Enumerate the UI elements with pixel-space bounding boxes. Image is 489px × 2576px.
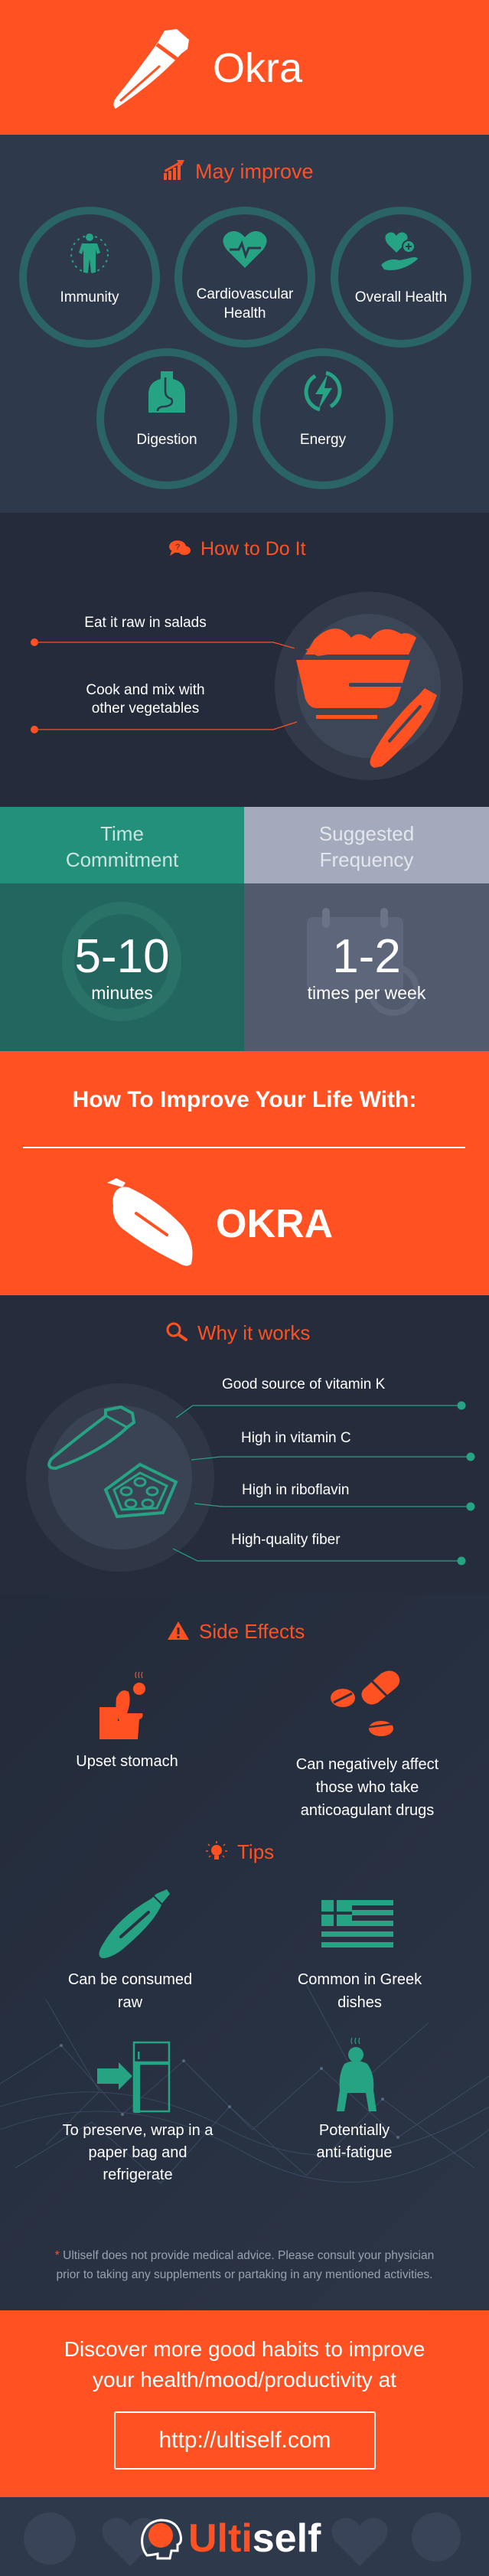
item: digestion: Digestion (136, 432, 197, 448)
icon: salad bowl (275, 592, 463, 780)
tip: preserve: paper bag and (88, 2144, 187, 2161)
panel: time commitment (0, 807, 244, 1051)
item: anticoagulant: Can negatively affect (296, 1756, 438, 1773)
heading: why it works: Why it works (197, 1321, 310, 1344)
fact: vitamin K (176, 1376, 465, 1418)
heading: how to do it: ? (175, 543, 180, 552)
tip: anti-fatigue: Potentially (319, 2122, 390, 2139)
heading: may improve: May improve (195, 160, 314, 183)
heading: time commitment: Commitment (66, 848, 178, 871)
tip: raw (68, 1889, 192, 2011)
item: upset stomach: Upset stomach (76, 1753, 178, 1770)
fact: riboflavin: High in riboflavin (242, 1482, 349, 1498)
item: anticoagulant: anticoagulant drugs (301, 1802, 434, 1819)
heading: suggested frequency (319, 822, 414, 871)
heading: How To Improve Your Life With: (73, 1087, 416, 1112)
tip: raw: Can be consumed (68, 1971, 192, 1988)
header (0, 0, 489, 135)
button: url (114, 2411, 376, 2470)
heading: time commitment: Time (100, 822, 144, 845)
callout: eat raw: Eat it raw in salads (84, 615, 207, 631)
icon: okra (107, 1178, 193, 1266)
heading: suggested frequency: Suggested (319, 822, 414, 845)
item: energy: Energy (300, 432, 346, 448)
value: 1-2 times per week: 1-2 (332, 930, 401, 983)
item: overall health (331, 207, 471, 348)
item: cardiovascular (174, 207, 315, 348)
panel: suggested frequency (244, 807, 489, 1051)
icon: okra (113, 29, 189, 109)
title: OKRA: OKRA (216, 1202, 333, 1246)
text: discover: your health/mood/productivity at (93, 2368, 396, 2392)
panel: side effects and tips (0, 1594, 489, 2310)
tip: raw: raw (118, 1994, 142, 2011)
logo: ultiself: Ultiself (188, 2516, 321, 2561)
title: Okra (213, 45, 302, 91)
heading: how to do it: How to Do It (200, 538, 306, 560)
tip: preserve: To preserve, wrap in a (63, 2122, 213, 2139)
item: anticoagulant (296, 1670, 439, 1819)
callout: cook and mix: other vegetables (92, 700, 199, 717)
text: discover: Discover more good habits to improve (64, 2337, 425, 2361)
item: cardiovascular: Health (224, 305, 266, 322)
item: cardiovascular: Cardiovascular (197, 286, 293, 302)
heading: time commitment (66, 822, 179, 871)
background icons (24, 2512, 461, 2566)
item: upset stomach (76, 1672, 178, 1770)
callout: cook and mix: Cook and mix with (86, 682, 205, 698)
panel: why it works (0, 1295, 489, 1594)
icon: clock ring (62, 902, 181, 1021)
tip: greek dishes (298, 1900, 422, 2011)
banner: discover more (0, 2310, 489, 2497)
fact: riboflavin (194, 1482, 474, 1511)
item: immunity (19, 207, 160, 348)
panel: time commitment: minutes (91, 983, 153, 1003)
fact: vitamin K: Good source of vitamin K (222, 1376, 385, 1392)
heading: side effects: Side Effects (199, 1620, 305, 1643)
banner: how to improve (0, 1051, 489, 1295)
item: anticoagulant: those who take (316, 1779, 419, 1796)
disclaimer: * Ultiself does not provide medical advice. Please consult your physician (55, 2249, 434, 2262)
panel: side effects and tips: anti-fatigue (317, 2144, 392, 2161)
item: immunity: Immunity (60, 289, 119, 305)
panel: how to do it (0, 513, 489, 807)
icon: okra slice (26, 1383, 214, 1572)
panel: may improve (0, 135, 489, 513)
heading: tips: Tips (237, 1840, 274, 1863)
footer (0, 2497, 489, 2576)
callout: eat raw (31, 615, 295, 648)
value: 5-10 minutes: 5-10 (74, 930, 170, 983)
background network (0, 1984, 489, 2183)
icon: calendar (307, 908, 419, 1016)
fact: fiber (173, 1532, 465, 1565)
disclaimer (55, 2249, 434, 2281)
tip: preserve: refrigerate (103, 2166, 173, 2183)
item: energy (253, 348, 393, 489)
button: url: http://ultiself.com (158, 2427, 331, 2453)
tip: preserve (63, 2041, 213, 2183)
item: overall health: Overall Health (355, 289, 447, 305)
fact: vitamin C: High in vitamin C (241, 1430, 351, 1446)
fact: vitamin C (191, 1430, 474, 1461)
tip: anti-fatigue (317, 2038, 392, 2161)
tip: greek dishes: Common in Greek (298, 1971, 422, 1988)
item: digestion (96, 348, 237, 489)
callout: cook and mix (31, 682, 297, 733)
text: discover (64, 2337, 425, 2392)
heading: tips (206, 1840, 274, 1863)
heading: suggested frequency: Frequency (320, 848, 413, 871)
disclaimer: prior to taking any supplements or partaking in any mentioned activities. (57, 2268, 432, 2281)
panel: suggested frequency: times per week (308, 983, 425, 1003)
tip: greek dishes: dishes (337, 1994, 382, 2011)
fact: fiber: High-quality fiber (231, 1532, 341, 1548)
